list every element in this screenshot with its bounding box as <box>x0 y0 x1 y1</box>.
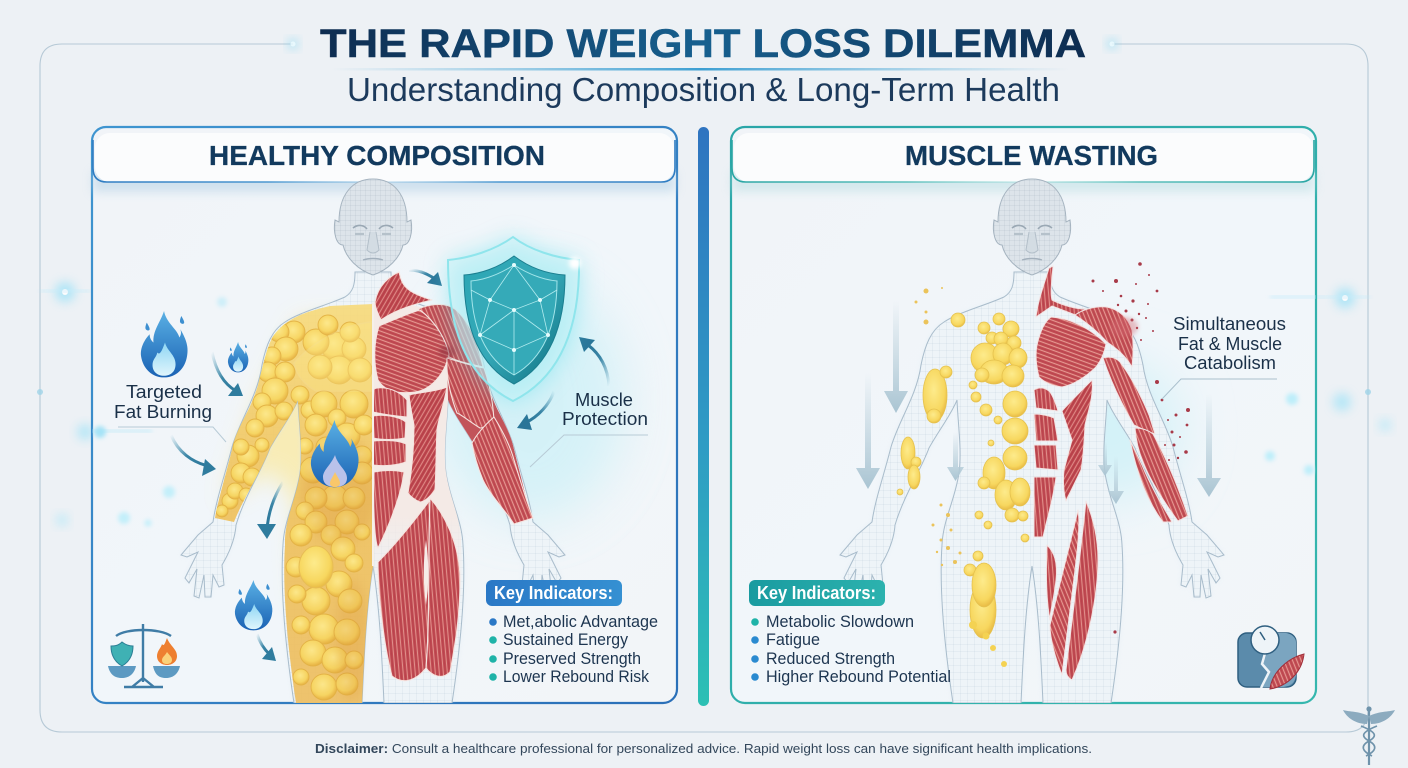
arrow: shield lower <box>517 391 554 430</box>
label: muscle protection: Muscle <box>575 389 633 410</box>
label: catabolism: Catabolism <box>1184 352 1276 373</box>
human figure: fat and muscle <box>181 179 565 710</box>
panel: healthy composition <box>92 127 677 710</box>
icon: big blue flame <box>141 311 188 377</box>
icon: lower flame <box>235 580 272 630</box>
key indicators: healthy: Key Indicators: <box>494 583 613 603</box>
key indicators: healthy: Lower Rebound Risk <box>503 668 650 686</box>
label: muscle protection: Protection <box>562 408 648 429</box>
muscle base <box>373 304 526 580</box>
key indicators: healthy <box>486 580 658 686</box>
label: targeted fat burning: Targeted <box>126 381 202 402</box>
arrow: fat down lower <box>257 634 276 661</box>
label: catabolism: Fat & Muscle <box>1178 333 1282 354</box>
subtitle: Understanding Composition & Long-Term Health <box>347 71 1060 108</box>
key indicators: healthy: Met,abolic Advantage <box>503 613 658 631</box>
header: healthy composition: HEALTHY COMPOSITION <box>209 140 545 171</box>
header: muscle wasting <box>732 133 1314 192</box>
key indicators: healthy: Sustained Energy <box>503 631 629 649</box>
key indicators: wasting <box>749 580 951 686</box>
key indicators: wasting: Reduced Strength <box>766 650 895 668</box>
disclaimer: Disclaimer: Consult a healthcare professional for personalized advice. Rapid weight loss can have significant health implications. <box>315 741 1092 756</box>
yellow particles <box>914 287 962 566</box>
label: muscle protection <box>564 392 647 425</box>
arrow: fat down upper <box>257 482 283 539</box>
icon: broken scale and muscle <box>1238 626 1304 689</box>
icon: balance scale <box>108 624 180 687</box>
fat half <box>215 304 373 703</box>
center divider <box>698 127 709 706</box>
muscle particles <box>1092 262 1190 634</box>
icon: small flame <box>228 342 248 372</box>
arrows: downward loss <box>856 301 1221 504</box>
fat deposits <box>897 313 1030 638</box>
key indicators: wasting: Fatigue <box>766 631 820 649</box>
side glow decorations <box>37 39 1391 526</box>
header: muscle wasting: MUSCLE WASTING <box>905 140 1158 171</box>
muscle half <box>373 272 533 681</box>
arrow: fat burn lower <box>171 435 216 476</box>
key indicators: wasting: Metabolic Slowdown <box>766 613 914 631</box>
label: targeted fat burning <box>116 384 211 422</box>
human figure: wasting <box>840 179 1224 703</box>
label: targeted fat burning: Fat Burning <box>114 401 212 422</box>
arrow: fat burn upper <box>212 352 243 396</box>
icon: protective shield <box>448 237 581 401</box>
wasted muscle strands <box>1034 266 1188 680</box>
header: healthy composition <box>93 133 675 192</box>
icon: caduceus <box>1343 706 1395 765</box>
label: catabolism: Simultaneous <box>1173 313 1286 334</box>
key indicators: wasting: Key Indicators: <box>757 583 876 603</box>
label: catabolism <box>1174 316 1286 369</box>
key indicators: healthy: Preserved Strength <box>503 650 641 668</box>
title: THE RAPID WEIGHT LOSS DILEMMA <box>320 22 1086 66</box>
title rule <box>332 68 1068 70</box>
icon: abdomen flame <box>311 420 359 487</box>
key indicators: wasting: Higher Rebound Potential <box>766 668 951 686</box>
arrow: to shield <box>409 270 442 286</box>
arrow: shield upper <box>579 337 609 386</box>
panel: muscle wasting <box>731 127 1320 703</box>
